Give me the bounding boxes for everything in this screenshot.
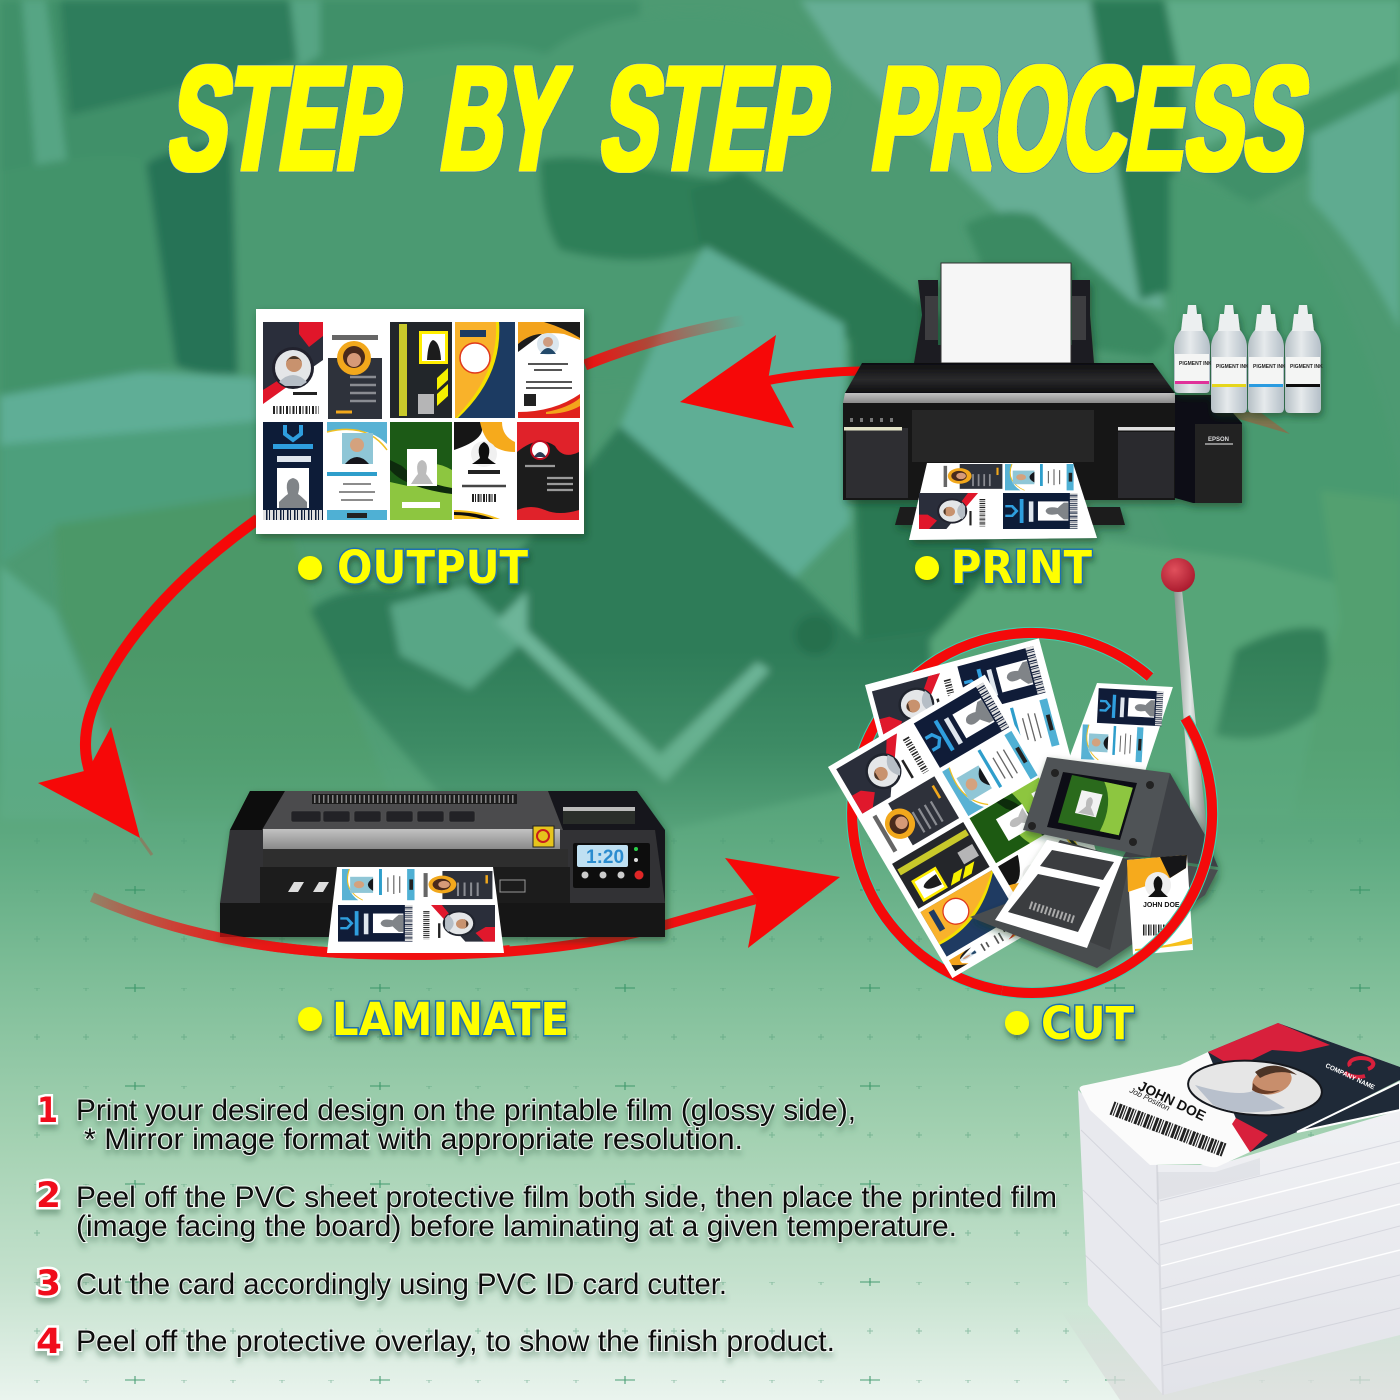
speckled press pad [55, 490, 400, 820]
step 1: Print your desired design on the printable film (glossy side), [76, 1094, 856, 1127]
ink bottles [1174, 305, 1323, 413]
step 3: Cut the card accordingly using PVC ID card cutter. [76, 1268, 727, 1301]
printer [843, 263, 1242, 540]
cutter base [970, 857, 1218, 968]
label: cut: CUT [1041, 997, 1134, 1050]
ink bottles: PIGMENT INK [1290, 364, 1323, 370]
red circle around cutter [852, 633, 1212, 993]
laminator [220, 791, 665, 937]
red swoosh over laminator front [92, 897, 510, 955]
top card: COMPANY NAME [1324, 1062, 1376, 1092]
paper support [914, 280, 1094, 363]
step 3: 3 [36, 1264, 61, 1304]
instructions [36, 1091, 1057, 1362]
step 4: Peel off the protective overlay, to show the finish product. [76, 1325, 835, 1358]
lever [1161, 558, 1210, 860]
finished card stack [1060, 1023, 1400, 1400]
top card: JOHN DOE [1136, 1077, 1208, 1124]
top card: Job Position [1127, 1085, 1172, 1113]
step 2: Peel off the PVC sheet protective film both side, then place the printed film [76, 1181, 1057, 1214]
title: STEP [592, 37, 840, 201]
title: STEP [160, 37, 412, 201]
cutter body [1123, 773, 1218, 867]
cut card: John Doe [1127, 855, 1193, 955]
ink tank [1175, 395, 1242, 503]
top card [1080, 1023, 1400, 1167]
below forearm [0, 372, 270, 445]
white slot frame [995, 840, 1123, 948]
step 2 [36, 1176, 1057, 1243]
output tray [895, 507, 1125, 525]
label: cut [1005, 997, 1134, 1050]
second card corner [1297, 1082, 1400, 1132]
front arc of circle [1002, 718, 1212, 993]
paper on cutter bed [800, 0, 1165, 310]
step 1 [37, 1091, 856, 1156]
forearm and hand [0, 12, 844, 396]
step 1: * Mirror image format with appropriate resolution. [84, 1123, 743, 1156]
printer top cover [845, 363, 1175, 393]
green card in window [1058, 775, 1133, 835]
machine frame [690, 170, 1000, 640]
faded red trail behind bottles [1215, 412, 1290, 434]
output sheet panel [256, 309, 584, 534]
printed sheets fan [828, 638, 1109, 978]
back sheet [865, 638, 1097, 902]
step 2: 2 [36, 1176, 61, 1216]
stack shadow [1060, 1310, 1400, 1400]
display vents [563, 807, 635, 824]
right hand [965, 212, 1170, 360]
card grid [263, 322, 580, 520]
base block [310, 426, 935, 830]
label: output: OUTPUT [337, 541, 528, 594]
front sheet [828, 675, 1109, 978]
dark tool under the hand [540, 157, 720, 260]
stack sides [1078, 1090, 1163, 1395]
card cutter [970, 757, 1218, 968]
title [160, 37, 1320, 201]
title: BY [432, 37, 577, 201]
ink bottles: PIGMENT INK [1179, 361, 1212, 367]
arrow: print to output [585, 320, 860, 428]
step 1: 1 [37, 1091, 58, 1131]
arrow: output to laminate [38, 519, 258, 855]
ink bottles: PIGMENT INK [1253, 364, 1286, 370]
step 4: 4 [36, 1322, 62, 1362]
control panel: 1:20 [586, 847, 624, 868]
label: laminate: LAMINATE [332, 993, 569, 1046]
arrow: laminate to cut [92, 858, 840, 955]
label: print: PRINT [951, 541, 1092, 594]
laminated sheet [327, 867, 504, 953]
cut card: John Doe: JOHN DOE [1143, 902, 1180, 909]
cutter head [1023, 757, 1170, 857]
ink tank: EPSON [1208, 437, 1229, 443]
step 2: (image facing the board) before laminating at a given temperature. [76, 1210, 957, 1243]
printed sheet [909, 463, 1097, 540]
ink bottles: PIGMENT INK [1216, 364, 1249, 370]
control panel [573, 843, 650, 888]
cut card behind cutter [1067, 682, 1173, 775]
lever knob [1161, 558, 1195, 592]
blank paper [941, 263, 1071, 363]
